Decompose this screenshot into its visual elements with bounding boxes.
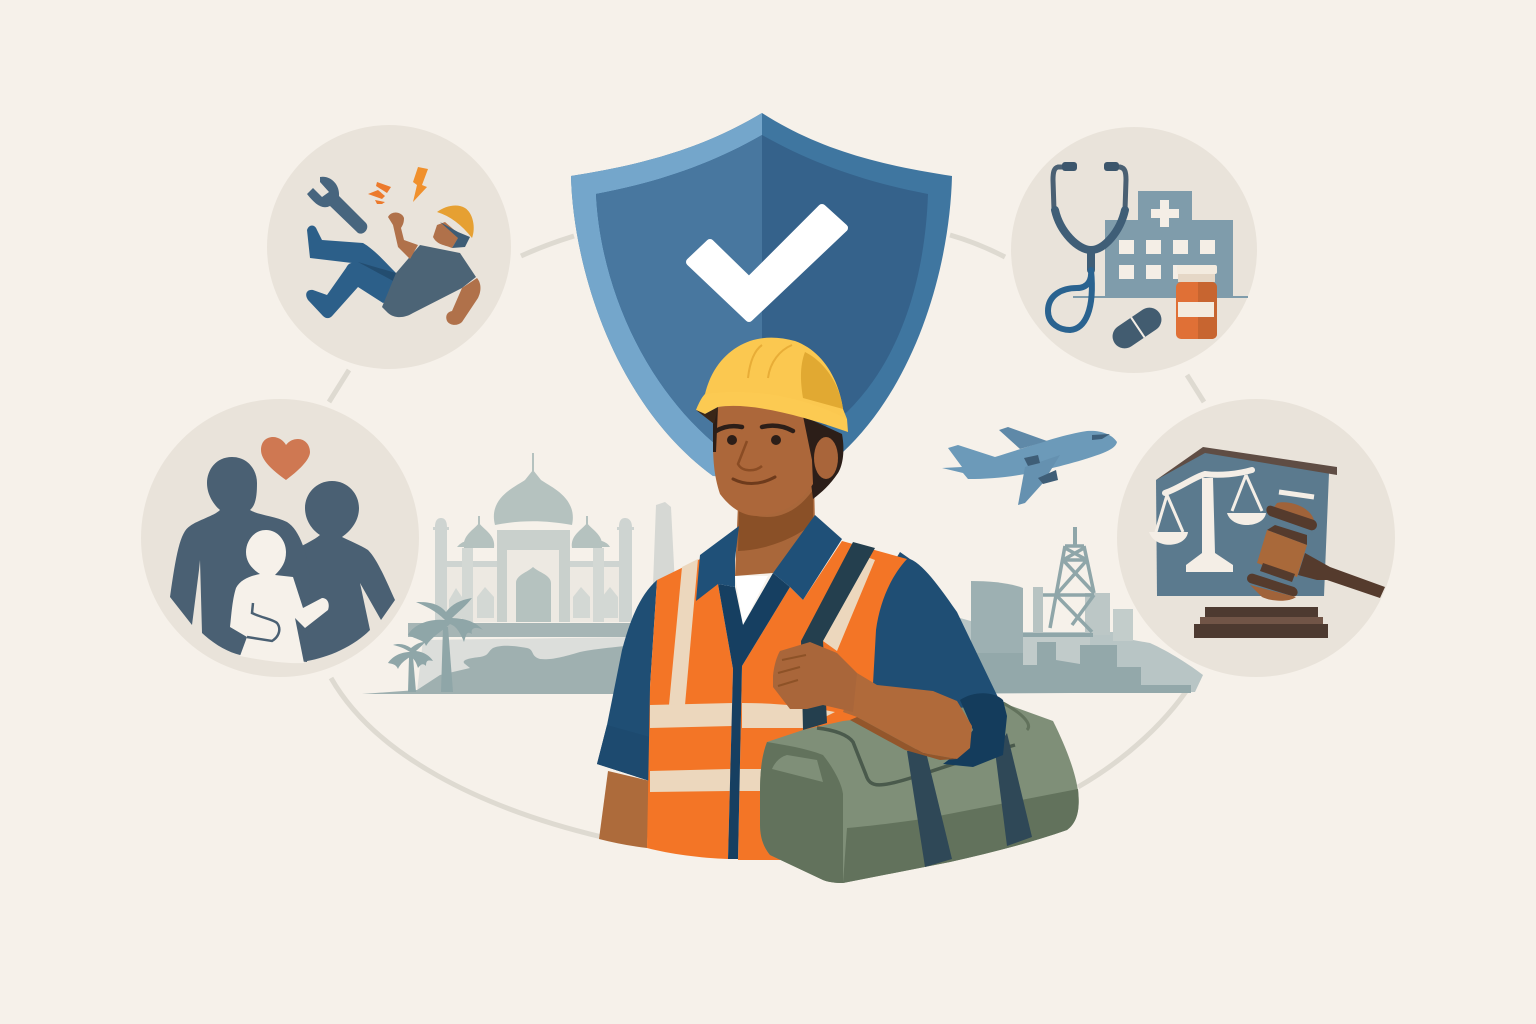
icon: courthouse panel [1156, 447, 1337, 596]
icon: check mark [690, 208, 844, 318]
panel: legal justice [1117, 399, 1395, 677]
icon: stethoscope [1048, 162, 1126, 330]
icon: heart [261, 437, 310, 480]
icon: wrench [307, 177, 367, 234]
arm and hand [773, 642, 1007, 767]
child silhouette [230, 530, 329, 663]
icon: lightning bolt [413, 167, 428, 202]
icon: hospital building [1073, 191, 1248, 297]
head face [713, 405, 843, 516]
icon: airplane [942, 427, 1117, 505]
icon: capsule [1108, 303, 1166, 353]
left arm and sleeve [597, 580, 657, 848]
worker figure [597, 338, 1079, 883]
distant tower [653, 502, 675, 585]
icon: spark lines [368, 182, 391, 204]
icon: balance scales [1149, 470, 1314, 572]
icon: sound block [1194, 607, 1328, 638]
right sleeve [865, 552, 1007, 767]
adult silhouettes [170, 457, 395, 662]
skyline: oil refinery [950, 527, 1203, 694]
panel: healthcare [1011, 127, 1257, 373]
icon: medicine bottle [1176, 265, 1217, 339]
hard hat [696, 338, 848, 432]
neck and t-shirt [735, 480, 815, 625]
duffel bag [760, 703, 1079, 883]
falling worker [306, 205, 480, 325]
panel: family [141, 399, 419, 677]
shield [571, 113, 952, 480]
icon: gavel [1247, 502, 1385, 601]
icon: palm trees [388, 598, 483, 692]
skyline: India landmark [362, 453, 675, 694]
shirt placket and collar [696, 515, 842, 859]
hi-vis vest [647, 541, 907, 860]
panel: workplace accident [267, 125, 511, 369]
